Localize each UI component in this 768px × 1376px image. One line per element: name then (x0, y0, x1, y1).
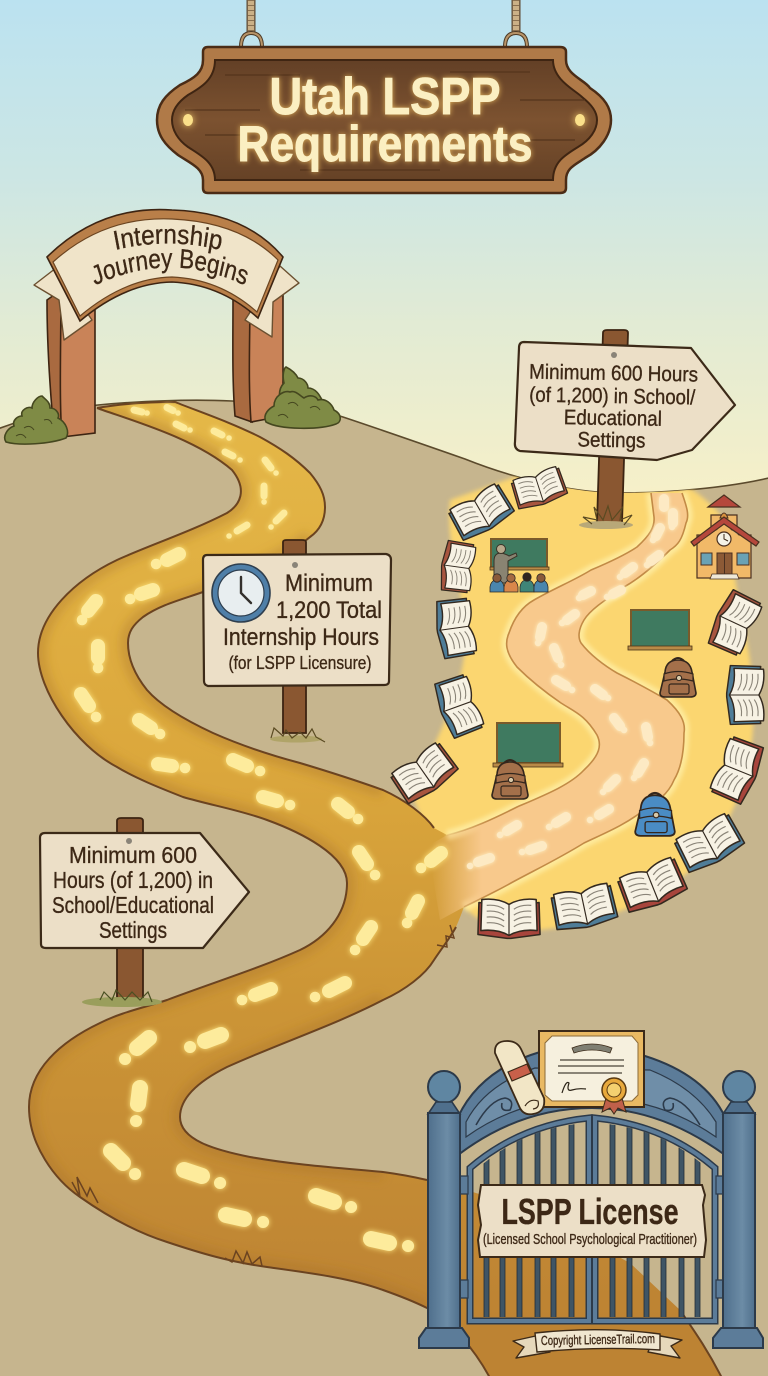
grass tufts on road edge (72, 925, 454, 1266)
title text: Requirements (238, 116, 532, 172)
board text: (of 1,200) in School/ (529, 384, 696, 409)
board text: Settings (577, 428, 646, 453)
chalkboard with teacher and students (490, 539, 549, 592)
license sign: LSPP License (502, 1191, 678, 1232)
icon: certificate (539, 1031, 644, 1114)
copyright ribbon: Copyright LicenseTrail.com (541, 1331, 655, 1348)
arrow board (515, 342, 735, 460)
right pillar (233, 280, 283, 422)
bush: left (5, 396, 68, 444)
ornamental arch (458, 1052, 725, 1155)
arch banner (47, 210, 283, 321)
chalkboard (628, 610, 692, 650)
icon: blue backpack (635, 793, 675, 836)
left pillar (47, 290, 95, 437)
license gate (419, 1031, 763, 1358)
board text: Minimum 600 Hours (529, 361, 698, 386)
bush: right (265, 367, 340, 428)
board text: Internship Hours (223, 624, 379, 651)
arch text: Journey Begins (93, 249, 248, 284)
icon: brown backpack (660, 658, 696, 697)
right gate post (713, 1071, 763, 1348)
nail (292, 562, 298, 568)
wooden plaque (157, 47, 611, 193)
board text (52, 842, 214, 943)
title text: Utah LSPP (270, 68, 500, 126)
ring of books (389, 465, 767, 938)
license sign: (Licensed School Psychological Practitioner) (483, 1232, 697, 1248)
board text (528, 361, 698, 453)
right gate door (595, 1110, 715, 1321)
license sign (478, 1185, 706, 1257)
footprints on school path (470, 499, 673, 866)
board (203, 554, 391, 686)
school path (428, 493, 688, 920)
chalkboard (493, 723, 563, 767)
arch text (93, 225, 248, 284)
hanging ropes (241, 0, 527, 47)
post (270, 540, 325, 742)
icon: clock (212, 564, 270, 622)
ribbon tails (34, 266, 299, 340)
sign: 600 hours, road side (40, 818, 249, 1007)
copyright ribbon (513, 1330, 682, 1358)
sign: 600 hours, school side (515, 330, 735, 529)
board text: 1,200 Total (276, 597, 382, 624)
board text: Settings (99, 917, 167, 943)
board text: (for LSPP Licensure) (228, 653, 372, 673)
icon: brown backpack (492, 760, 528, 799)
hinges (460, 1176, 724, 1298)
board text: Minimum (285, 570, 373, 597)
left gate post (419, 1071, 469, 1348)
sign: 1,200 total hours (203, 540, 391, 742)
sky (0, 0, 768, 500)
nail (611, 352, 617, 358)
school zone glow (412, 476, 753, 931)
post (82, 818, 162, 1007)
icon: diploma scroll (495, 1041, 544, 1114)
post (579, 330, 633, 529)
ground (0, 400, 768, 1376)
footprints on main road (81, 408, 441, 1246)
start arch (33, 208, 300, 438)
arrow board (40, 833, 249, 948)
arch text: Internship (114, 225, 222, 254)
title sign (157, 0, 611, 193)
icon: schoolhouse (691, 495, 759, 579)
board text: Hours (of 1,200) in (53, 867, 213, 893)
title text (238, 68, 532, 172)
nail lights (183, 114, 585, 126)
nail (126, 838, 132, 844)
board text: Educational (564, 406, 662, 431)
board text: Minimum 600 (69, 842, 197, 868)
board text: School/Educational (52, 892, 214, 918)
left gate door (470, 1110, 589, 1321)
board text (223, 570, 382, 673)
main golden road (29, 402, 722, 1376)
